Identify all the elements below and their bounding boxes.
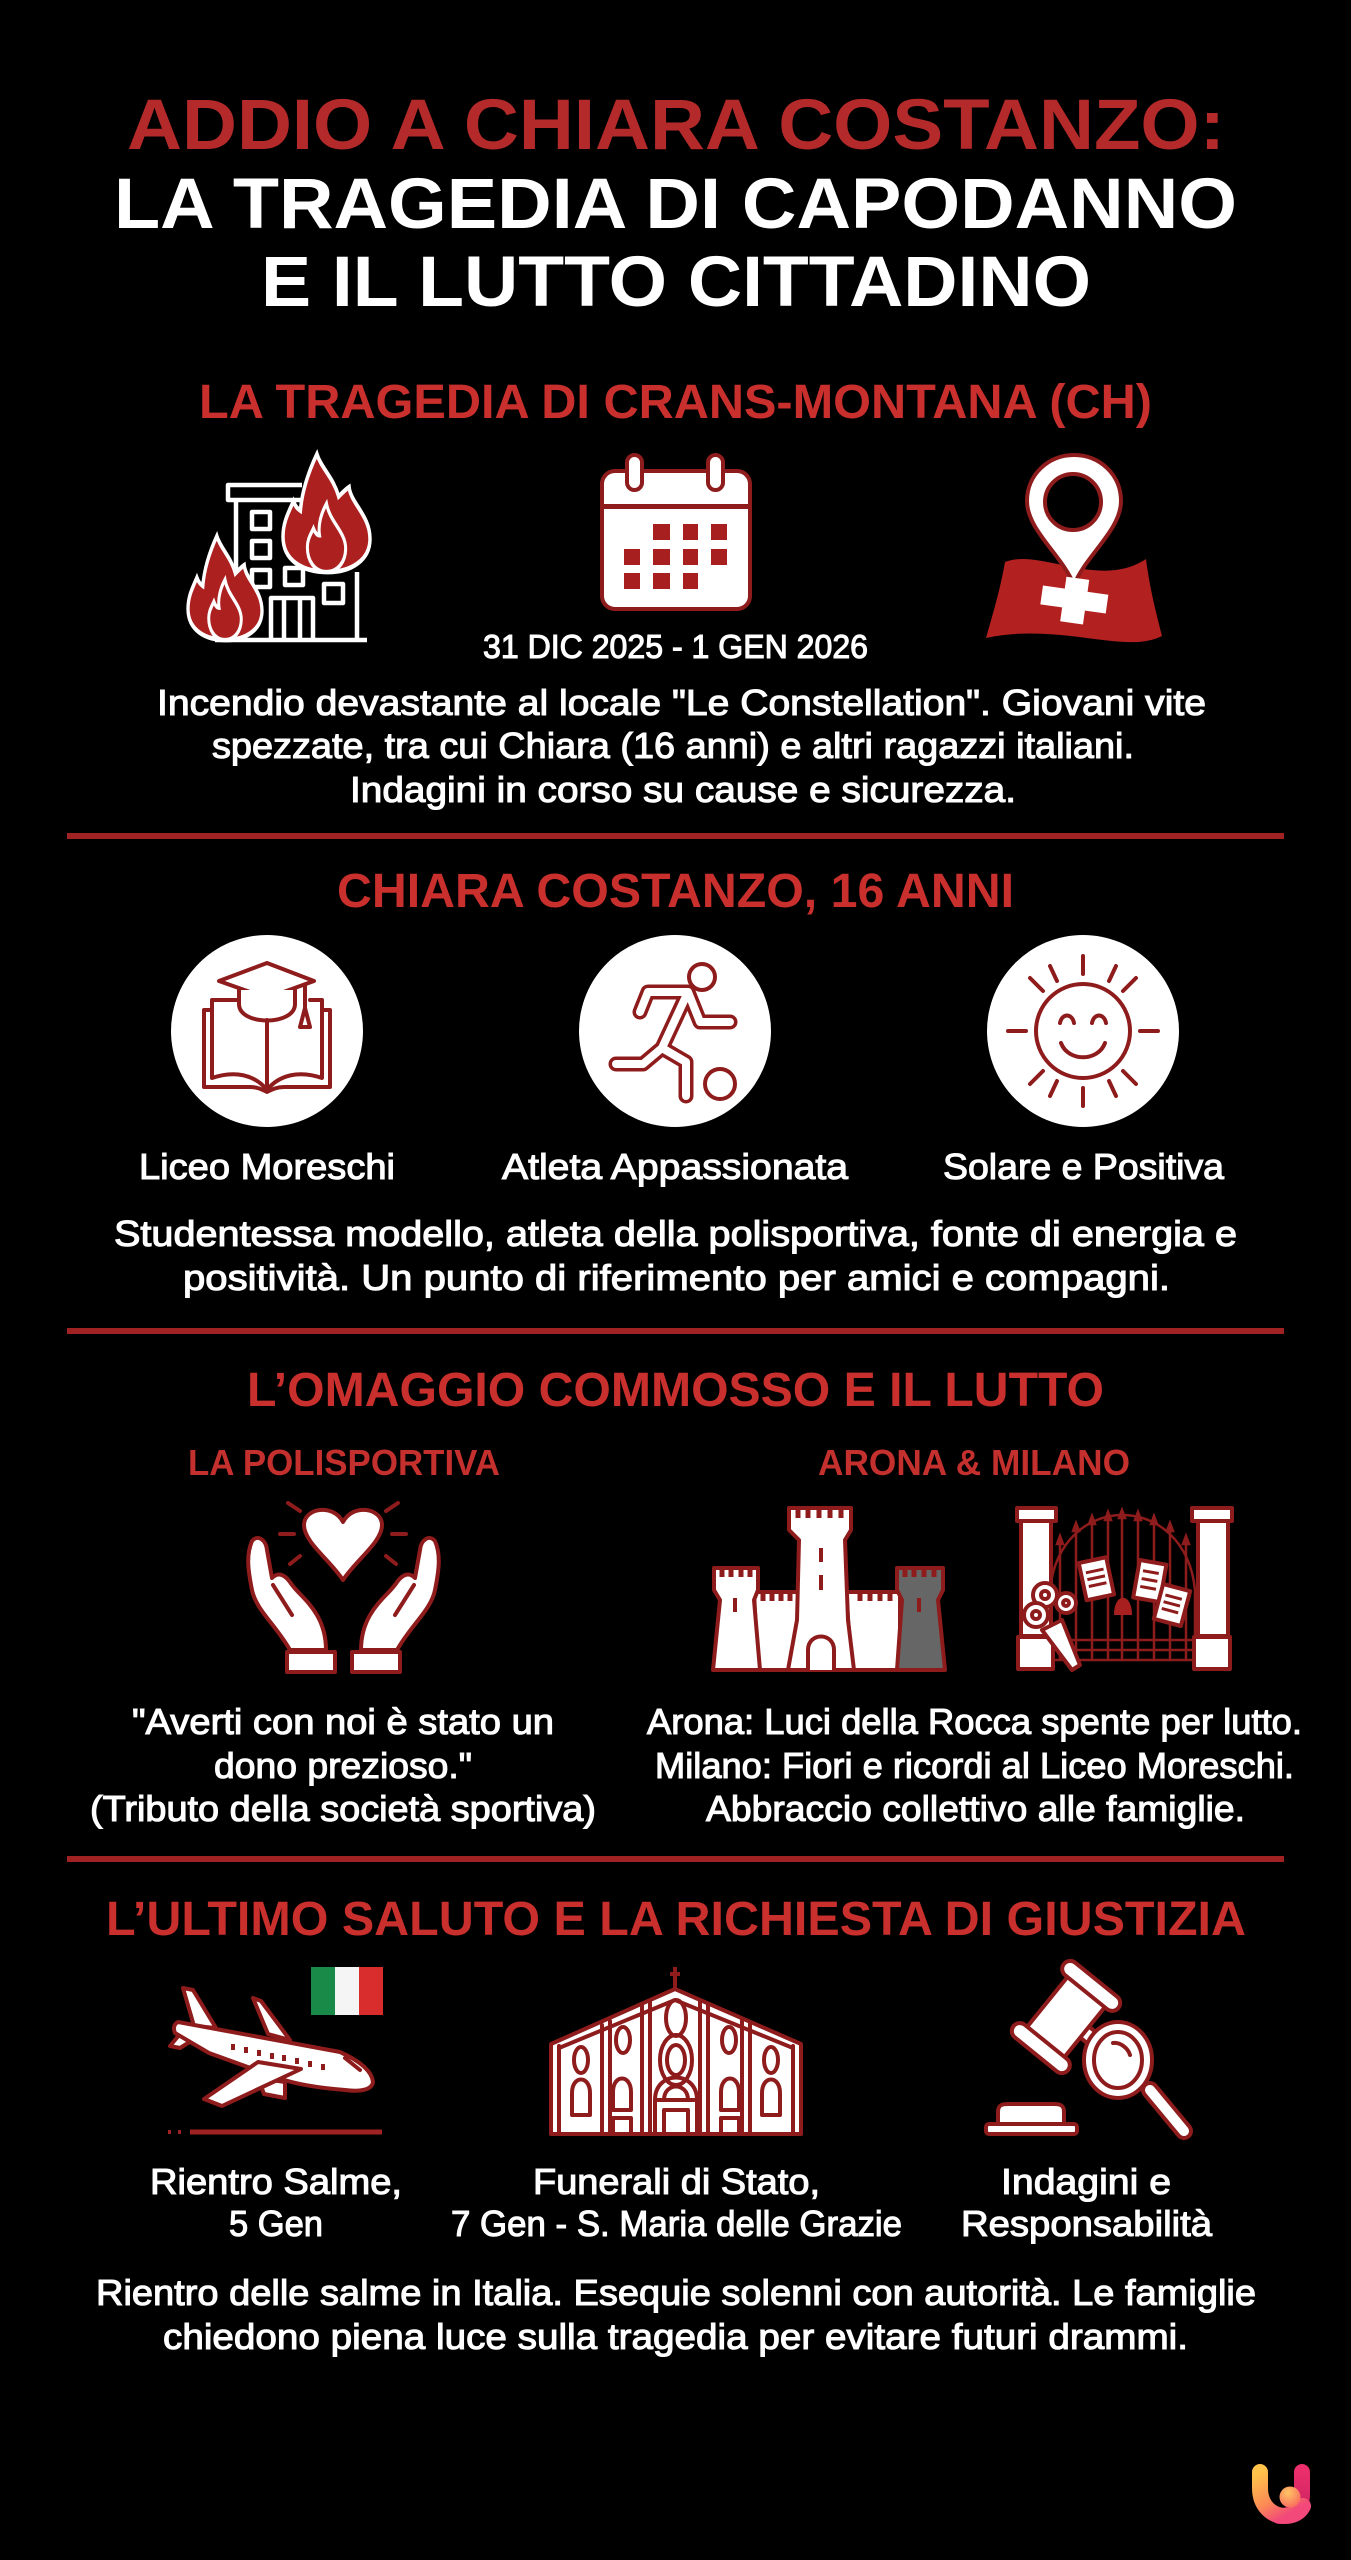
heading: la tragedia: LA TRAGEDIA DI CRANS-MONTANA (CH) [199, 376, 1152, 429]
labels: traits: Liceo Moreschi [139, 1146, 395, 1187]
text block: Chiara description: positività. Un punto di riferimento per amici e compagni. [183, 1257, 1170, 1298]
icon: gate with flowers and notes [1017, 1508, 1232, 1670]
text block: closing description: chiedono piena luce sulla tragedia per evitare futuri drammi. [163, 2316, 1188, 2357]
labels: final steps: Rientro Salme, [150, 2161, 402, 2202]
text block: Arona e Milano: Abbraccio collettivo alle famiglie. [706, 1788, 1245, 1829]
icon: burning building [188, 454, 370, 640]
labels: final steps: Funerali di Stato, [533, 2161, 820, 2202]
icon: gavel and magnifying glass [986, 1958, 1184, 2134]
panel: l'omaggio commosso [90, 1364, 1302, 1829]
subheading: Arona e Milano: ARONA & MILANO [818, 1442, 1130, 1483]
text block: tributo polisportiva: "Averti con noi è stato un [132, 1701, 554, 1742]
subheading: la polisportiva: LA POLISPORTIVA [188, 1442, 500, 1483]
heading: l'omaggio: L’OMAGGIO COMMOSSO E IL LUTTO [247, 1364, 1104, 1417]
icon: calendar [602, 455, 750, 609]
text block: Chiara description: Studentessa modello, atleta della polisportiva, fonte di energia e [114, 1213, 1237, 1254]
text block: tragedia description: Incendio devastante al locale "Le Constellation". Giovani vite [157, 682, 1206, 723]
icon: runner with ball [579, 935, 771, 1127]
text block: tragedia description: spezzate, tra cui Chiara (16 anni) e altri ragazzi italiani. [212, 725, 1134, 766]
icon: italian flag [311, 1967, 383, 2015]
labels: final steps [150, 2161, 1213, 2244]
panel: la tragedia di Crans-Montana [157, 376, 1206, 810]
labels: final steps: Indagini e [1001, 2161, 1171, 2202]
icon: landing airplane [168, 1988, 382, 2132]
text block: tragedia description [157, 682, 1206, 810]
icon: hands holding heart [248, 1503, 439, 1672]
heading: Chiara Costanzo: CHIARA COSTANZO, 16 ANNI [337, 865, 1014, 918]
text block: Arona e Milano: Arona: Luci della Rocca spente per lutto. [647, 1701, 1302, 1742]
text block: closing description: Rientro delle salme in Italia. Esequie solenni con autorità. Le famiglie [96, 2272, 1256, 2313]
labels: final steps: 7 Gen - S. Maria delle Grazie [451, 2203, 902, 2244]
panel: Chiara Costanzo [114, 865, 1237, 1298]
icon: church facade [551, 1967, 801, 2134]
icon: smiling sun [987, 935, 1179, 1127]
labels: final steps: 5 Gen [229, 2203, 323, 2244]
labels: traits [139, 1146, 1225, 1187]
labels: traits: Solare e Positiva [943, 1146, 1225, 1187]
text block: closing description [96, 2272, 1256, 2357]
icon: book and graduation cap [171, 935, 363, 1127]
text block: tragedia description: Indagini in corso su cause e sicurezza. [350, 769, 1016, 810]
heading: l'ultimo saluto: L’ULTIMO SALUTO E LA RICHIESTA DI GIUSTIZIA [106, 1893, 1246, 1946]
text block: Arona e Milano: Milano: Fiori e ricordi al Liceo Moreschi. [655, 1745, 1294, 1786]
text block: Arona e Milano [647, 1701, 1302, 1829]
labels: final steps: Responsabilità [961, 2203, 1213, 2244]
title: ADDIO A CHIARA COSTANZO: [127, 86, 1225, 165]
title: E IL LUTTO CITTADINO [261, 243, 1091, 322]
text block: tributo polisportiva: dono prezioso." [214, 1745, 472, 1786]
icon: brand logo [1260, 2472, 1303, 2516]
date label: 31 DIC 2025 - 1 GEN 2026 [483, 628, 868, 665]
icon: map pin on swiss flag [986, 455, 1162, 642]
text block: tributo polisportiva: (Tributo della società sportiva) [90, 1788, 596, 1829]
title [114, 86, 1237, 322]
text block: tributo polisportiva [90, 1701, 596, 1829]
text block: Chiara description [114, 1213, 1237, 1298]
title: LA TRAGEDIA DI CAPODANNO [114, 165, 1237, 244]
panel: l'ultimo saluto [96, 1893, 1256, 2357]
icon: rocca castle [713, 1508, 945, 1670]
labels: traits: Atleta Appassionata [502, 1146, 849, 1187]
